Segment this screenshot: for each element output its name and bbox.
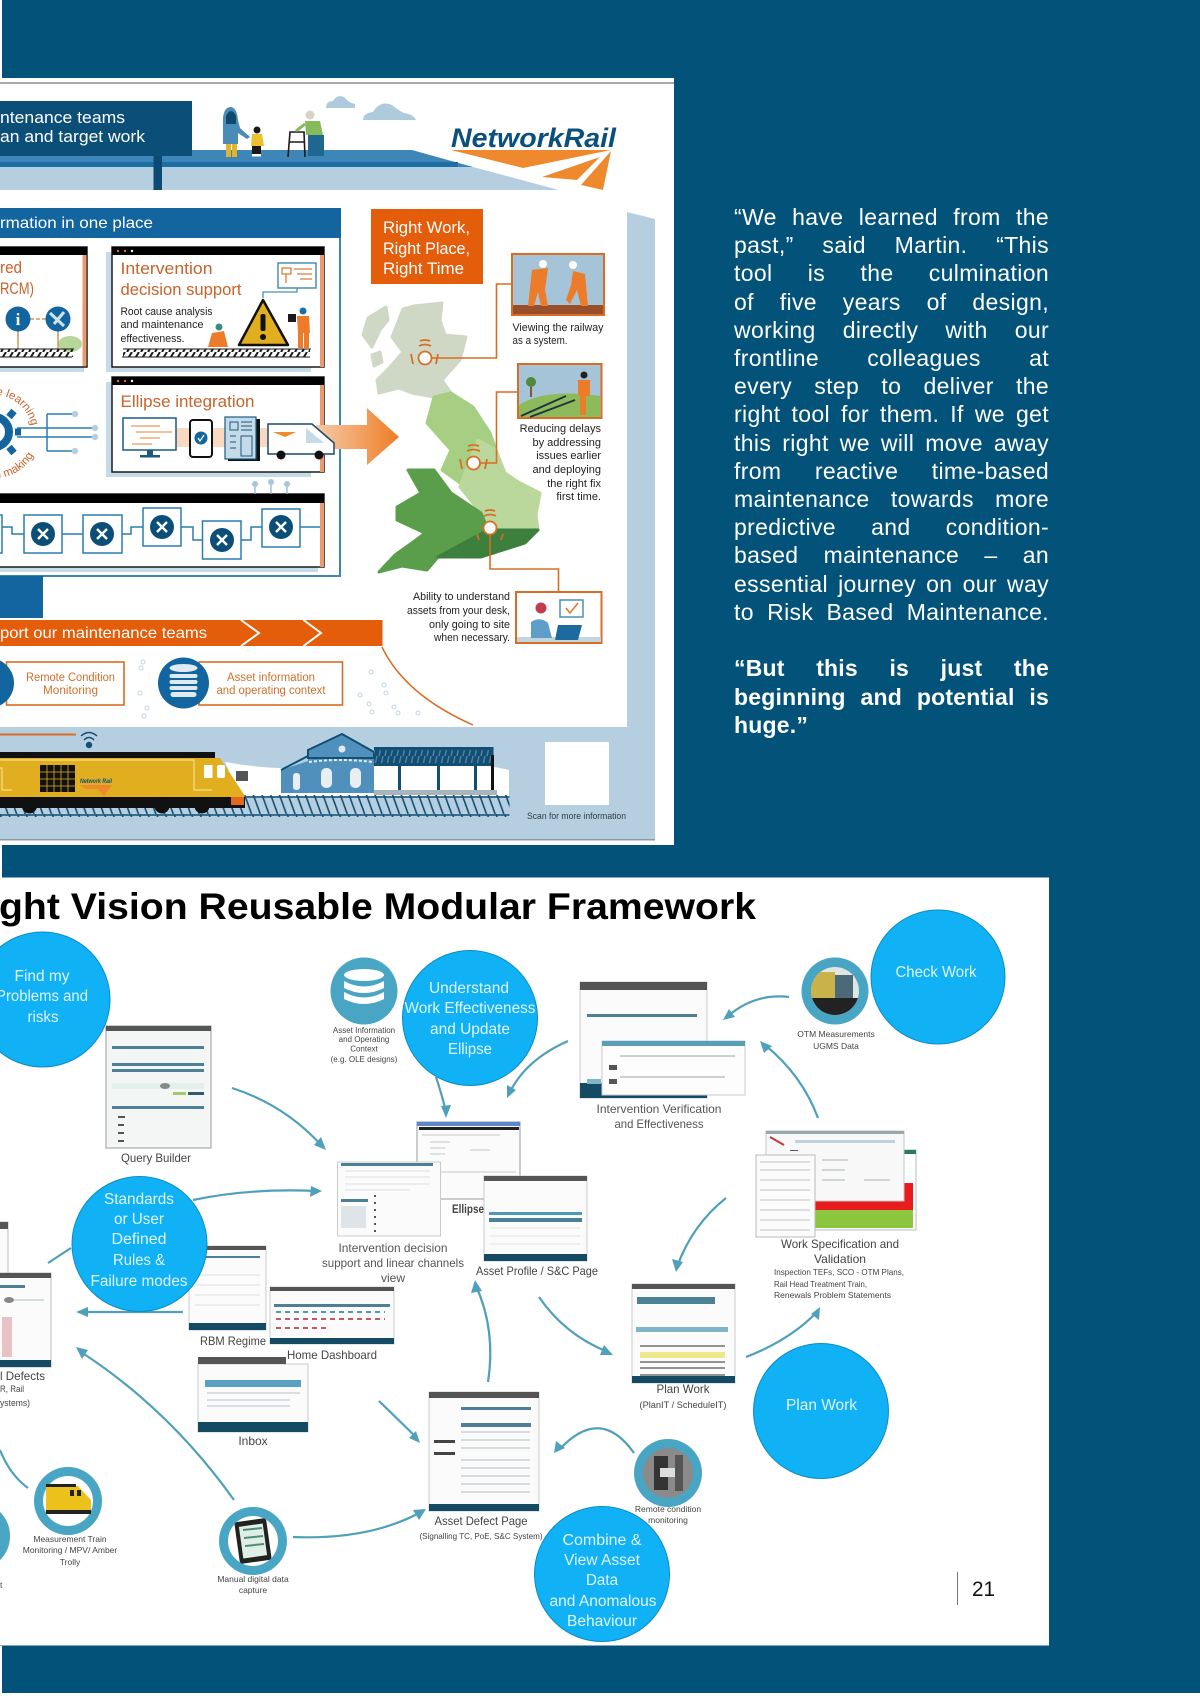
Scotland xyxy=(363,303,466,397)
icon: measurement train xyxy=(34,1467,102,1535)
node 4 xyxy=(202,521,241,559)
circle: combine and view: Data xyxy=(586,1572,618,1589)
banner: support our maintenance teams xyxy=(0,620,382,646)
text block: Martin quote: “We have learned from the xyxy=(734,204,1049,230)
text block: Martin quote: frontline colleagues at xyxy=(734,345,1049,371)
label: asset defect page: (Signalling TC, PoE, S&C System) xyxy=(420,1531,543,1541)
circle: understand work effectiveness: and Update xyxy=(430,1021,510,1038)
circle: understand work effectiveness xyxy=(402,950,538,1086)
label: defects: ystems) xyxy=(0,1398,30,1408)
icon: document xyxy=(225,417,260,461)
icon: database xyxy=(170,664,198,697)
text: viewing the railway: as a system. xyxy=(512,335,568,347)
icon: van xyxy=(268,424,334,460)
text block: Martin quote: working directly with our xyxy=(734,317,1049,343)
circle: understand work effectiveness: Work Effectiveness xyxy=(404,1000,536,1017)
text: reducing delays: Reducing delays xyxy=(520,423,601,435)
label: plan work: Plan Work xyxy=(656,1382,710,1396)
icon: decision diagram xyxy=(263,263,316,298)
card: RCM xyxy=(0,247,87,372)
box: remote condition monitoring: Remote Condition xyxy=(26,672,115,684)
icon: OTM measurements xyxy=(802,958,868,1024)
icon: clouds xyxy=(326,96,416,120)
midlands and east xyxy=(460,440,540,530)
label: asset information: Asset Information xyxy=(333,1026,395,1035)
card: Ellipse integration xyxy=(106,377,324,477)
card text: Root cause analysis xyxy=(120,306,213,318)
label: RBM regime: RBM Regime xyxy=(200,1334,266,1348)
icon: machine learning gear xyxy=(0,389,98,478)
label: partial: t xyxy=(0,1580,3,1590)
text: viewing the railway xyxy=(512,322,604,347)
label: asset defect page xyxy=(420,1514,543,1541)
screenshot: RBM regime xyxy=(189,1246,266,1330)
text: scan for more information: Scan for more information xyxy=(527,811,626,822)
text block: Martin quote xyxy=(734,204,1049,625)
screenshot: work specification xyxy=(756,1131,916,1237)
label: manual capture xyxy=(217,1574,289,1595)
icon: tool circle xyxy=(46,306,70,332)
station xyxy=(281,734,497,795)
label: asset profile: Asset Profile / S&C Page xyxy=(476,1264,598,1278)
text: ability to understand: when necessary. xyxy=(433,632,510,644)
icon: partial circle xyxy=(0,1507,5,1565)
text block: Martin quote: tool is the culmination xyxy=(734,260,1049,286)
text block: Martin quote: maintenance towards more xyxy=(734,486,1049,512)
marker: central England xyxy=(460,445,487,470)
label: intervention xyxy=(322,1241,464,1285)
icon: phone xyxy=(190,420,212,457)
card title: Ellipse integration xyxy=(120,392,254,411)
callout: right work right place right time: Right Place, xyxy=(383,240,470,258)
panel: reusable modular framework xyxy=(0,878,1049,1646)
callout: right work right place right time xyxy=(371,209,483,284)
circle: standards: Standards xyxy=(104,1191,174,1208)
card title xyxy=(120,259,242,299)
card: RCM: red xyxy=(0,259,22,277)
label: intervention: view xyxy=(381,1271,405,1285)
circle: combine and view: Combine & xyxy=(562,1532,642,1549)
card text: effectiveness. xyxy=(120,333,184,345)
circle: check work: Check Work xyxy=(896,964,977,981)
QR placeholder xyxy=(545,742,609,805)
label: asset information: Context xyxy=(350,1044,379,1054)
icon: warning triangle xyxy=(239,300,288,345)
label: defects xyxy=(0,1369,45,1408)
label: intervention: support and linear channels xyxy=(322,1256,464,1270)
circle: combine and view: Behaviour xyxy=(567,1613,637,1630)
label: measurement train xyxy=(23,1534,117,1567)
card title: decision support xyxy=(120,280,242,299)
circle: understand work effectiveness: Understand xyxy=(429,980,509,997)
icon: asset information database xyxy=(330,958,398,1024)
logo: NetworkRail: NetworkRail xyxy=(451,123,617,153)
circle: standards: or User xyxy=(114,1211,164,1228)
image: workers on railway xyxy=(512,254,604,315)
label: manual capture: Manual digital data xyxy=(217,1574,289,1584)
label: intervention: Intervention decision xyxy=(338,1241,448,1255)
label: OTM: UGMS Data xyxy=(813,1041,859,1051)
marker: south England xyxy=(477,510,503,540)
card: intervention decision support xyxy=(106,247,324,372)
screenshot: intervention decision support xyxy=(338,1162,440,1236)
light blue frame xyxy=(0,212,655,839)
icon: manual digital capture xyxy=(219,1507,287,1575)
text: reducing delays: and deploying xyxy=(532,464,601,476)
node 5 xyxy=(262,509,300,547)
canopy xyxy=(374,747,494,766)
label: work specification: Inspection TEFs, SCO - OTM Plans, xyxy=(774,1267,904,1277)
label: defects: l Defects xyxy=(0,1369,45,1383)
box: asset information and operating context: and operating context xyxy=(216,685,326,697)
text: reducing delays: first time. xyxy=(556,491,601,503)
chevrons xyxy=(241,620,321,646)
image: worker by track xyxy=(518,364,602,418)
text block: Martin quote: essential journey on our way xyxy=(734,571,1049,597)
label: manual capture: capture xyxy=(239,1585,267,1595)
icon: crouching worker xyxy=(208,324,228,347)
Wales, midlands and south west xyxy=(379,470,488,572)
banner: support our maintenance teams: port our maintenance teams xyxy=(0,625,207,642)
screenshot: intervention verification xyxy=(580,982,745,1098)
label: plan work xyxy=(640,1382,726,1410)
label: measurement train: Monitoring / MPV/ Amber xyxy=(23,1545,117,1555)
circle: find my problems and risks xyxy=(0,932,110,1067)
text: viewing the railway: Viewing the railway xyxy=(512,322,604,334)
train logo xyxy=(80,778,112,796)
icon: monitor xyxy=(123,418,176,458)
circle: find my problems and risks: Find my xyxy=(14,968,70,985)
marker: Scotland xyxy=(411,340,438,364)
icon: wifi xyxy=(81,732,97,748)
logo: NetworkRail xyxy=(451,123,617,190)
text: reducing delays xyxy=(520,423,601,503)
text block: bold quote: beginning and potential is xyxy=(734,684,1049,710)
screenshot: plan work xyxy=(632,1284,735,1383)
icon: remote condition monitoring xyxy=(634,1439,702,1507)
text block: Martin quote: past,” said Martin. “This xyxy=(734,232,1049,258)
arrowheads xyxy=(76,1009,820,1520)
railway track xyxy=(0,795,510,817)
label: verification: and Effectiveness xyxy=(614,1117,704,1131)
title: ght Vision Reusable Modular Framework xyxy=(0,886,756,927)
text: ability to understand: assets from your desk, xyxy=(407,605,510,617)
circle: standards: Failure modes xyxy=(90,1273,188,1290)
text block: Martin quote: right tool for them. If we get xyxy=(734,401,1049,427)
screenshot: asset defect page xyxy=(429,1392,539,1511)
sign text xyxy=(0,108,146,146)
label: query builder: Query Builder xyxy=(121,1151,191,1165)
label: remote condition xyxy=(635,1504,701,1525)
text: reducing delays: issues earlier xyxy=(536,450,601,462)
label: work specification: Renewals Problem Statements xyxy=(774,1290,891,1300)
node 1 xyxy=(24,515,62,553)
white landscape xyxy=(225,759,509,796)
connector lines xyxy=(432,284,558,592)
road band xyxy=(0,150,559,190)
text block: Martin quote: of five years of design, xyxy=(734,289,1049,315)
screenshot: query builder xyxy=(106,1026,211,1148)
text block: bold quote: huge.” xyxy=(734,712,808,738)
label: verification xyxy=(596,1102,722,1131)
panel heading: rmation in one place xyxy=(0,215,153,232)
screenshot: home dashboard xyxy=(270,1287,394,1344)
circle: plan work xyxy=(754,1344,888,1478)
label: plan work: (PlanIT / ScheduleIT) xyxy=(640,1400,726,1410)
arrow: to map xyxy=(316,408,399,465)
text block: Martin quote: this right we will move away xyxy=(734,430,1049,456)
arrows xyxy=(0,996,818,1537)
label: asset defect page: Asset Defect Page xyxy=(434,1514,528,1528)
label: OTM: OTM Measurements xyxy=(797,1029,875,1039)
label: asset information xyxy=(331,1026,398,1064)
box: remote condition monitoring xyxy=(0,658,124,708)
text block: Martin quote: every step to deliver the xyxy=(734,373,1049,399)
label: verification: Intervention Verification xyxy=(596,1102,722,1116)
label: asset information: (e.g. OLE designs) xyxy=(331,1055,398,1064)
screenshot: defects xyxy=(0,1222,51,1367)
label: work specification xyxy=(774,1237,904,1300)
sign board xyxy=(0,101,192,190)
box: asset information and operating context xyxy=(158,658,342,708)
panel: information in one place xyxy=(0,208,341,577)
screenshot: inbox xyxy=(198,1357,308,1432)
circle: check work xyxy=(871,910,1005,1044)
text block: Martin quote: to Risk Based Maintenance. xyxy=(734,599,1049,625)
arc text xyxy=(0,389,38,478)
south xyxy=(438,530,538,557)
circle: combine and view: View Asset xyxy=(564,1552,641,1569)
train xyxy=(0,732,248,814)
label: OTM xyxy=(797,1029,875,1051)
circle: plan work: Plan Work xyxy=(786,1397,857,1414)
circle: standards xyxy=(72,1176,207,1312)
screenshot: asset profile xyxy=(484,1176,587,1261)
callout: right work right place right time: Right Work, xyxy=(383,219,470,237)
card title: Intervention xyxy=(120,259,212,278)
text: ability to understand: only going to site xyxy=(429,619,510,631)
circle: understand work effectiveness: Ellipse xyxy=(448,1041,492,1058)
icon: woman and child xyxy=(223,107,264,157)
page number xyxy=(957,1572,995,1605)
circle: find my problems and risks: risks xyxy=(28,1009,59,1026)
circle: combine and view xyxy=(534,1506,670,1642)
text: ability to understand xyxy=(407,591,510,644)
text block: Martin quote: from reactive time-based xyxy=(734,458,1049,484)
icon: woman with walker xyxy=(288,110,324,157)
callout: right work right place right time: Right Time xyxy=(383,260,464,278)
image: desk worker xyxy=(516,592,602,643)
icon: standing worker xyxy=(288,308,310,348)
card: RCM: RCM) xyxy=(0,280,34,298)
train logo: Network Rail xyxy=(80,778,112,785)
text block: bold quote: “But this is just the xyxy=(734,655,1049,681)
label: home dashboard: Home Dashboard xyxy=(287,1348,377,1362)
text block: Martin quote: based maintenance – an xyxy=(734,542,1049,568)
text: ability to understand: Ability to understand xyxy=(413,591,510,603)
label: defects: R, Rail xyxy=(0,1384,24,1394)
label: asset information: and Operating xyxy=(339,1035,389,1044)
blue block xyxy=(0,576,43,618)
circle: standards: Rules & xyxy=(113,1252,166,1269)
box: remote condition monitoring: Monitoring xyxy=(43,685,98,697)
text block: bold quote xyxy=(734,655,1049,738)
sign text: ntenance teams xyxy=(0,108,125,127)
decorative dots xyxy=(138,660,420,718)
label: ellipse: Ellipse xyxy=(452,1202,484,1216)
card text xyxy=(120,306,213,345)
sign text: an and target work xyxy=(0,127,146,146)
label: remote condition: Remote condition xyxy=(635,1504,701,1514)
card: sensor chain xyxy=(0,479,324,572)
node 3 xyxy=(143,508,181,546)
text block: Martin quote: predictive and condition- xyxy=(734,514,1049,540)
label: inbox: Inbox xyxy=(238,1434,268,1448)
label: measurement train: Trolly xyxy=(60,1557,81,1567)
label: work specification: Rail Head Treatment Train, xyxy=(774,1279,867,1289)
label: work specification: Validation xyxy=(814,1252,866,1266)
box: asset information and operating context: Asset information xyxy=(227,672,315,684)
northern England xyxy=(427,393,496,490)
card text: and maintenance xyxy=(120,319,204,331)
label: work specification: Work Specification and xyxy=(781,1237,899,1251)
node 2 xyxy=(83,515,122,553)
label: measurement train: Measurement Train xyxy=(33,1534,107,1544)
text: reducing delays: by addressing xyxy=(532,437,601,449)
page number: 21 xyxy=(972,1578,995,1601)
screenshot: ellipse xyxy=(417,1122,520,1199)
icon: info: i xyxy=(16,310,21,329)
text: reducing delays: the right fix xyxy=(547,478,601,490)
circle: standards: Defined xyxy=(112,1231,166,1248)
map: Great Britain xyxy=(363,303,540,572)
label: remote condition: monitoring xyxy=(648,1515,688,1525)
circle: combine and view: and Anomalous xyxy=(550,1593,657,1610)
